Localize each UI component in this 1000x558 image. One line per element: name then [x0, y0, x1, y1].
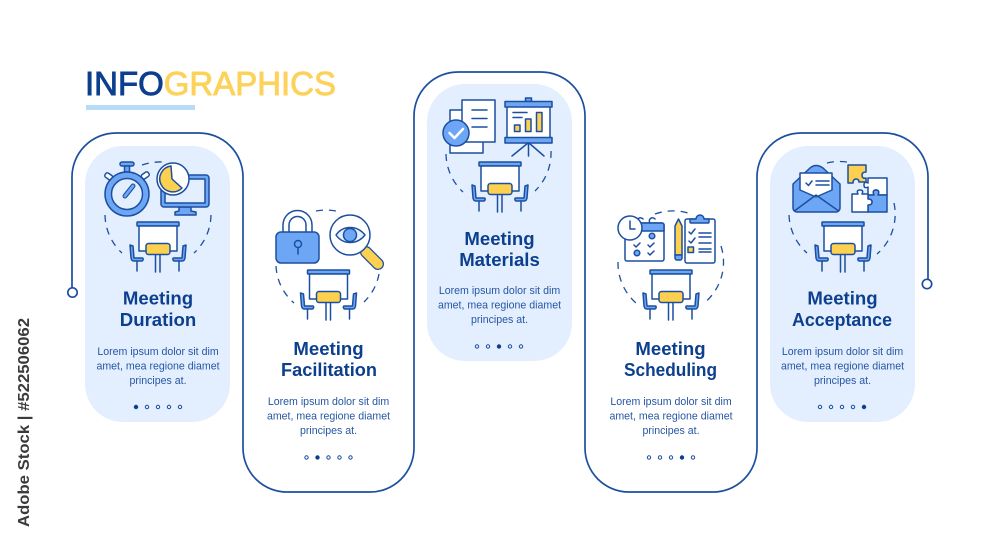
pagination dots: [305, 456, 352, 459]
body text: Lorem ipsum dolor sit dim: [268, 396, 389, 408]
icon: puzzle pieces: [848, 165, 887, 212]
icon: presentation board with bar chart: [505, 98, 552, 156]
panel: Meeting Materials background: [427, 84, 572, 361]
panel: Meeting Acceptance background: [770, 146, 915, 422]
illustration: table and dashed ring: [789, 161, 895, 272]
panel: Meeting Duration background: [85, 146, 230, 422]
icon: calendar with clock: [618, 216, 664, 261]
continuous outline connecting all cards: [68, 72, 932, 492]
heading line 2: Materials: [459, 249, 540, 270]
pagination dots: [134, 405, 182, 409]
body text: principes at.: [814, 375, 871, 387]
body text: amet, mea regione diamet: [96, 360, 220, 372]
icon: padlock: [276, 210, 319, 263]
body text: Lorem ipsum dolor sit dim: [439, 285, 560, 297]
body text: Lorem ipsum dolor sit dim: [97, 346, 219, 358]
body text: principes at.: [471, 314, 528, 326]
body text: principes at.: [129, 375, 187, 387]
card 5: Meeting Acceptance: [781, 161, 904, 409]
body text: principes at.: [300, 425, 357, 437]
icon: monitor with clock: [157, 163, 209, 215]
heading line 2: Acceptance: [792, 309, 892, 330]
icon: envelope with letter: [793, 166, 840, 212]
illustration: table and dashed ring: [276, 210, 379, 320]
card 1: Meeting Duration: [96, 162, 220, 409]
heading: Meeting: [464, 228, 535, 249]
body text: amet, mea regione diamet: [609, 410, 733, 422]
heading: Meeting: [807, 288, 878, 308]
illustration: table and dashed ring: [105, 162, 211, 272]
body text: amet, mea regione diamet: [267, 410, 390, 422]
card 3: Meeting Materials: [438, 98, 561, 348]
icon: stopwatch: [104, 162, 150, 216]
icon: magnifier with eye: [330, 215, 378, 264]
illustration: table and dashed ring: [446, 151, 551, 212]
illustration: table and dashed ring: [618, 211, 724, 320]
icon: pencil: [675, 219, 682, 260]
pagination dots: [818, 405, 866, 409]
body text: Lorem ipsum dolor sit dim: [782, 346, 903, 358]
body text: Lorem ipsum dolor sit dim: [610, 396, 732, 408]
title: INFOGRAPHICS: INFOGRAPHICS: [85, 66, 336, 103]
heading line 2: Duration: [120, 309, 196, 330]
vertical stock credit: Adobe Stock | #522506062: [16, 318, 33, 527]
body text: amet, mea regione diamet: [438, 300, 561, 312]
body text: principes at.: [642, 425, 700, 437]
heading line 2: Scheduling: [624, 359, 717, 380]
card 4: Meeting Scheduling: [609, 211, 733, 459]
heading line 2: Facilitation: [281, 359, 377, 380]
pagination dots: [647, 456, 695, 459]
icon: documents with check badge: [443, 100, 495, 153]
icon: clipboard checklist: [685, 215, 715, 263]
pagination dots: [475, 345, 523, 348]
heading: Meeting: [123, 288, 193, 308]
body text: amet, mea regione diamet: [781, 360, 904, 372]
heading: Meeting: [293, 338, 364, 359]
card 2: Meeting Facilitation: [267, 210, 390, 459]
heading: Meeting: [635, 338, 706, 359]
